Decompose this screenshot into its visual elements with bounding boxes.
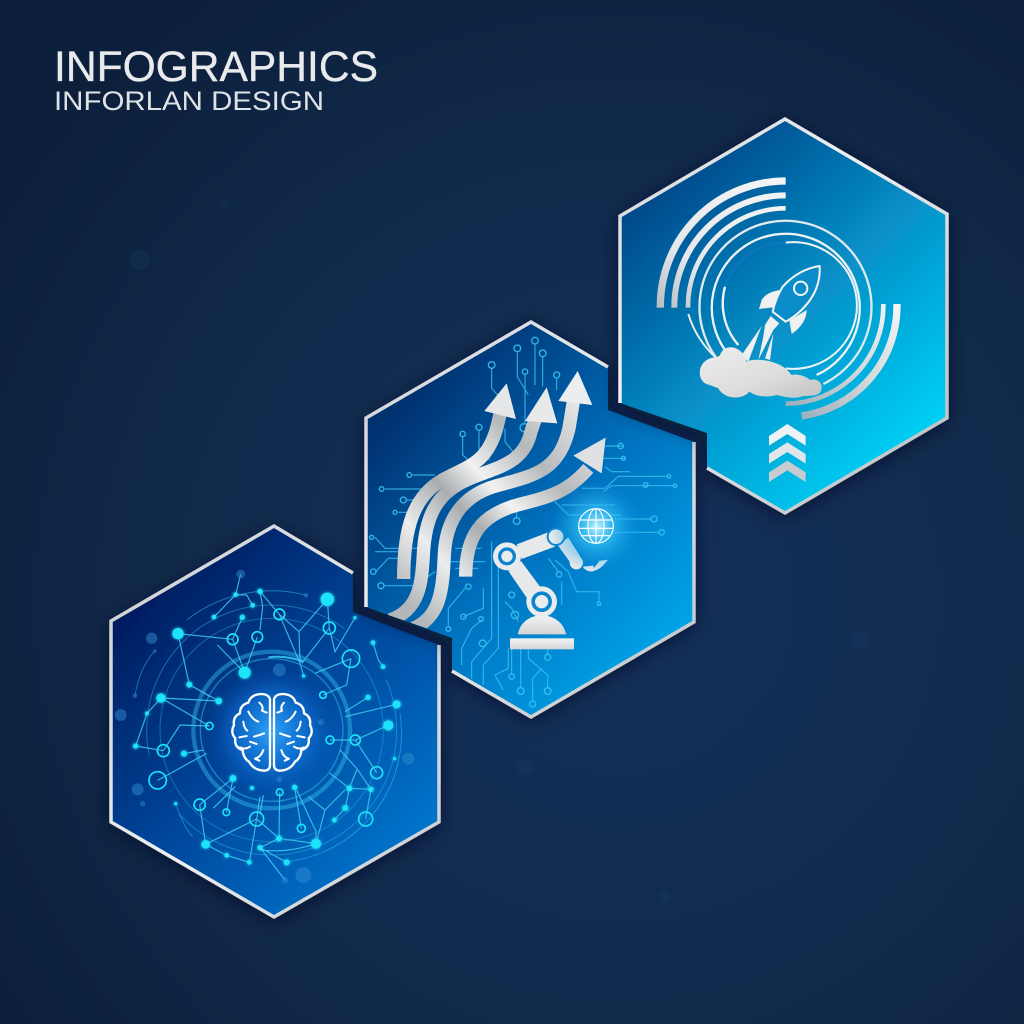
central glow	[208, 668, 335, 795]
network links	[136, 574, 397, 880]
concentric rings	[135, 591, 402, 862]
title block	[54, 43, 378, 116]
growth arrows	[390, 371, 606, 628]
circuit terminals	[370, 337, 677, 707]
orbit arcs	[660, 181, 897, 416]
bokeh background dots	[130, 200, 869, 903]
icon: smoke cloud	[700, 347, 822, 398]
title: INFOGRAPHICS	[54, 43, 378, 91]
arrow 3	[413, 371, 592, 628]
filled nodes	[133, 589, 401, 865]
hexagon 2 silver border	[366, 322, 608, 607]
dim nodes	[115, 570, 414, 883]
panel: hexagon 1 artificial intelligence	[111, 526, 439, 917]
arrow 4	[466, 438, 606, 577]
circuit traces	[375, 344, 673, 701]
hexagon 1 silver border	[111, 526, 439, 917]
arrow 2	[390, 387, 557, 620]
icon: robot arm	[493, 528, 606, 649]
icon: upward chevrons	[769, 424, 806, 482]
panel: hexagon 3 rocket launch	[620, 119, 947, 513]
panel: hexagon 2 automation and growth	[366, 322, 694, 717]
subtitle: INFORLAN DESIGN	[54, 86, 324, 116]
icon: rocket	[742, 266, 820, 362]
hexagon 2 lower border	[452, 442, 694, 717]
hexagon 1 fill	[111, 526, 439, 917]
neural network	[115, 570, 414, 883]
icon: glowing globe	[552, 485, 633, 572]
hexagon 2 fill	[366, 322, 694, 717]
panel 2 artwork	[370, 337, 677, 707]
ring nodes	[149, 609, 383, 832]
arrow 1	[404, 383, 516, 579]
icon: brain	[232, 694, 312, 771]
hexagon 3 fill	[620, 119, 947, 513]
hexagon 3 silver border	[620, 119, 947, 513]
